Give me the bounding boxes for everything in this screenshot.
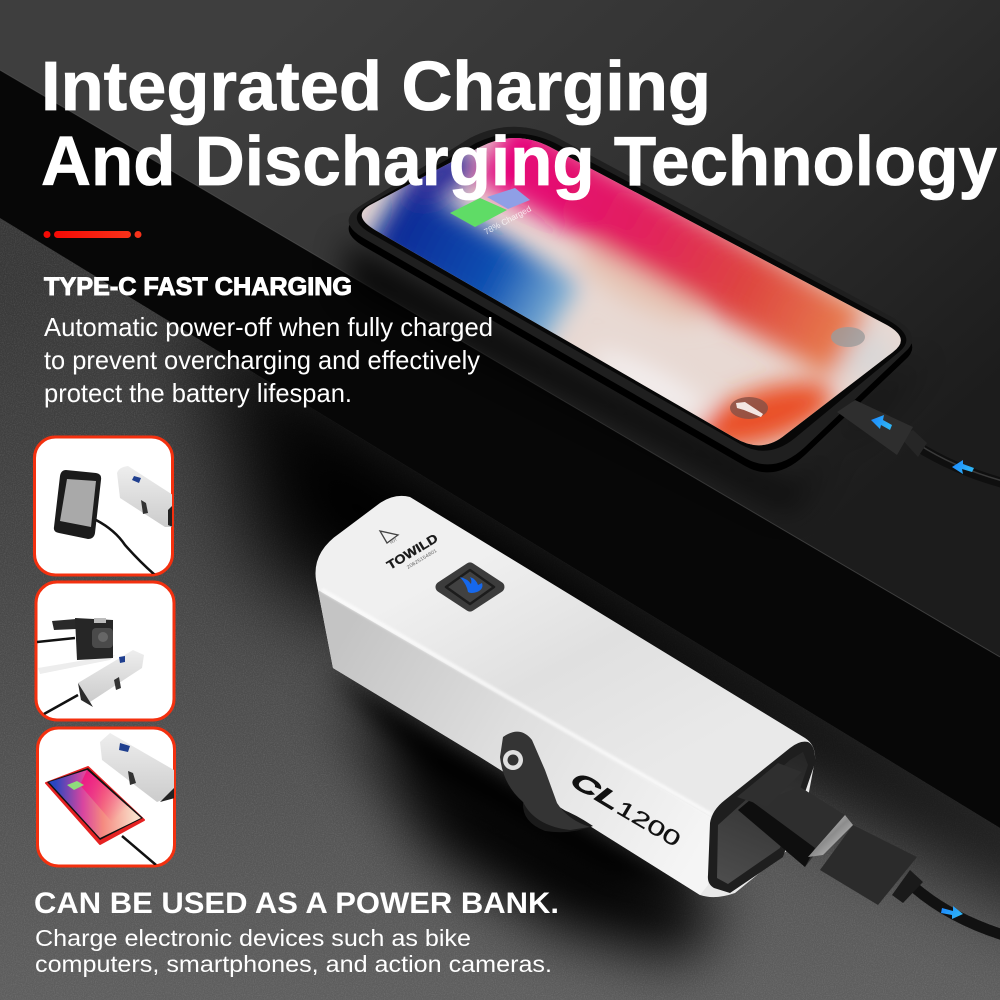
flashlight button bbox=[730, 397, 768, 419]
rubber cap bbox=[737, 763, 802, 807]
panel: smartphone thumbnail bbox=[38, 728, 175, 866]
text block: power bank: computers, smartphones, and action cameras. bbox=[35, 951, 552, 977]
model label bbox=[562, 769, 684, 852]
phone screen bbox=[362, 138, 901, 446]
bike computer bbox=[54, 470, 101, 539]
arrow bbox=[952, 460, 974, 474]
warning icon: HOT bbox=[389, 537, 399, 545]
model label: CL bbox=[562, 769, 629, 814]
front face bbox=[708, 742, 815, 893]
panel: bike computer thumbnail bbox=[34, 437, 173, 575]
battery icon on screen: 78% Charged bbox=[482, 203, 533, 237]
brand mark: 20625154801 bbox=[406, 548, 438, 571]
text block: type-c fast charging: TYPE-C FAST CHARGING bbox=[44, 273, 352, 301]
model label: 1200 bbox=[612, 796, 684, 852]
mini light bbox=[100, 733, 174, 802]
text block: type-c fast charging: to prevent overcharging and effectively bbox=[44, 345, 480, 375]
phone on the desk bbox=[330, 110, 930, 510]
USB plug and cable bbox=[737, 763, 1000, 935]
text block: power bank bbox=[34, 887, 559, 977]
brand mark: TOWILD bbox=[384, 531, 440, 573]
red divider bbox=[44, 231, 142, 238]
phone charging cable bbox=[837, 400, 1000, 483]
mount bracket bbox=[500, 732, 593, 832]
text block: power bank: CAN BE USED AS A POWER BANK. bbox=[34, 887, 559, 920]
title: And Discharging Technology bbox=[41, 122, 997, 200]
panel: action camera thumbnail bbox=[36, 582, 174, 720]
light body bbox=[316, 496, 815, 897]
arrow bbox=[871, 415, 892, 430]
text block: type-c fast charging: protect the battery lifespan. bbox=[44, 378, 352, 408]
text block: power bank: Charge electronic devices such as bike bbox=[35, 925, 471, 951]
warning icon bbox=[380, 531, 399, 545]
title: Integrated Charging bbox=[41, 47, 711, 125]
power button bbox=[441, 568, 499, 606]
flame icon bbox=[460, 577, 482, 593]
action camera bbox=[52, 619, 76, 630]
mini phone bbox=[46, 767, 144, 844]
phone body bbox=[349, 135, 912, 472]
arrow bbox=[941, 906, 963, 919]
mini light bbox=[117, 466, 173, 527]
mini light bbox=[78, 650, 144, 702]
product: bike light bbox=[316, 496, 815, 897]
text block: type-c fast charging bbox=[44, 273, 493, 408]
text block: type-c fast charging: Automatic power-off when fully charged bbox=[44, 312, 493, 342]
title bbox=[41, 47, 997, 200]
side face bbox=[318, 590, 712, 895]
camera button bbox=[831, 327, 865, 347]
battery icon on screen bbox=[450, 188, 533, 237]
